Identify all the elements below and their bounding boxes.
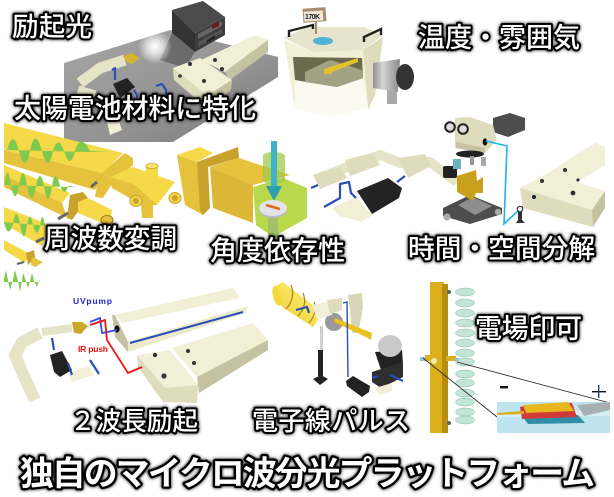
heat sink [50, 351, 72, 377]
panel: excitation light setup [64, 1, 278, 142]
power supply box [160, 1, 225, 68]
mirror on stand [516, 206, 525, 223]
chamber body [284, 40, 368, 117]
translucent green box [253, 178, 307, 237]
blue beam arrow [266, 141, 282, 201]
connector 1 [91, 182, 97, 187]
light source glow [138, 30, 172, 64]
black box [346, 376, 370, 397]
blue laser path [486, 141, 533, 224]
device cross section [497, 402, 610, 433]
beam tube [80, 60, 125, 83]
microwave wave 1 [7, 138, 110, 163]
main waveguide [177, 147, 290, 223]
heading: electron beam pulse: 電子線パルス [252, 406, 410, 436]
heading: frequency modulation: 周波数変調 [44, 224, 177, 254]
stage [443, 195, 502, 224]
left blue cable [311, 185, 318, 188]
heading: excitation light: 励起光 [12, 12, 92, 42]
blue cable right [90, 360, 99, 374]
waveguide 2 [4, 165, 113, 225]
handles [289, 25, 313, 37]
long blue cable [343, 302, 348, 377]
left tube [15, 333, 40, 400]
microwave wave 3 [4, 214, 48, 236]
chamber right wall [363, 37, 383, 110]
blue bracket [156, 84, 166, 100]
gun block [312, 293, 363, 333]
yellow sample arm [324, 58, 358, 74]
panel: electron beam pulse [271, 282, 403, 397]
tube to sample [42, 328, 72, 332]
yellow electron beam arrow [334, 318, 372, 340]
sample holder arms [420, 355, 459, 364]
grey floor plate [64, 30, 278, 142]
right blue cable [372, 376, 378, 378]
small cream part [107, 118, 122, 135]
cream long housing [173, 35, 268, 108]
right handle [364, 29, 381, 42]
lower cream housing [137, 323, 268, 403]
tube optics [313, 153, 457, 189]
connector 4 [17, 262, 24, 264]
panel: frequency modulation waveguides [4, 123, 181, 292]
cream base [332, 197, 372, 222]
green electromagnetic field discs [456, 288, 474, 424]
green cylinder [263, 152, 285, 184]
red IR beam [90, 320, 142, 373]
yellow sample holder [457, 170, 483, 201]
waveguide 3 [4, 207, 50, 246]
yellow accelerator coil [271, 282, 323, 327]
blue cable lower [134, 90, 137, 98]
connector 2 [58, 213, 68, 219]
panel: time and space resolved setup [311, 113, 605, 227]
connector 3 [36, 238, 44, 242]
black stand [313, 326, 328, 385]
microwave wave 4 [4, 270, 41, 292]
yellow vertical waveguide [430, 282, 451, 433]
optics tube lower [78, 90, 95, 95]
blue port [313, 37, 333, 45]
blue cable [112, 68, 115, 80]
waveguide 1 [4, 123, 181, 218]
yellow sample holder [123, 53, 140, 64]
cream housing [520, 143, 605, 227]
short blue cable [397, 176, 405, 182]
heading: two wavelength excitation: ２波長励起 [70, 407, 198, 436]
heading: angle dependence: 角度依存性 [210, 236, 345, 266]
minus sign [500, 386, 508, 388]
stage post [268, 218, 278, 237]
blue UV beam [90, 318, 117, 333]
panel: two wavelength excitation [15, 288, 268, 403]
chamber lower white front [295, 78, 368, 117]
blue cable side [68, 363, 72, 375]
zoom lines [423, 358, 497, 417]
heat sink [357, 178, 402, 214]
label IR push: IR push [78, 344, 108, 354]
panel: electric field application [420, 282, 610, 433]
label UVpump: UVpump [73, 296, 112, 306]
cream base [68, 366, 94, 382]
blue cables [296, 307, 309, 313]
title: unique microwave spectroscopy platform: 独自のマイクロ波分光プラットフォーム [20, 455, 595, 493]
heading: temperature and atmosphere: 温度・雰囲気 [418, 23, 580, 53]
chamber top [284, 27, 383, 52]
waveguide 4 [4, 240, 43, 267]
sample stage disc [259, 200, 287, 218]
long cream housing with blue line [112, 288, 248, 352]
heading: time and space resolved: 時間・空間分解 [408, 234, 595, 264]
window [293, 57, 363, 87]
pump assembly [372, 335, 403, 395]
yellow sample holder [72, 322, 88, 334]
sign 170K: 170K [305, 14, 320, 21]
plus sign [592, 385, 606, 398]
panel: temperature and atmosphere chamber [284, 7, 414, 117]
heading: solar cell materials: 太陽電池材料に特化 [14, 94, 256, 124]
heat sink [113, 78, 135, 98]
microwave wave 2 [5, 172, 77, 199]
blue bracket [390, 375, 403, 381]
window floor [305, 60, 363, 87]
panel: angle dependence [177, 141, 307, 237]
camera [443, 159, 461, 178]
view port cylinder [373, 59, 414, 104]
blue cable upper [52, 338, 54, 350]
heading: electric field: 電場印可 [475, 314, 582, 344]
zoom line right [457, 362, 610, 403]
microscope body [445, 113, 525, 166]
blue cables [324, 182, 356, 207]
